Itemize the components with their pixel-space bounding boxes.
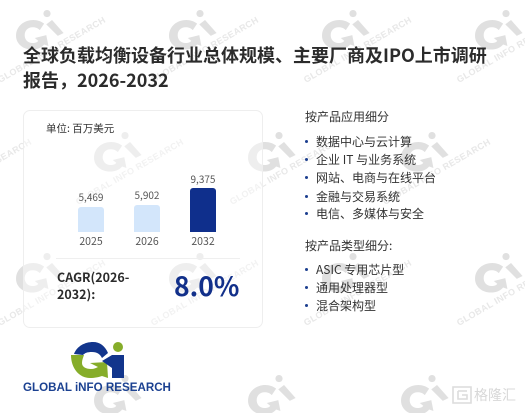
icon: G green body [71, 355, 108, 378]
title: 报告，2026-2032 [23, 67, 169, 93]
CAGR label: CAGR(2026- [57, 267, 129, 286]
watermark pattern: GLOBAL INFO RESEARCH [149, 15, 260, 85]
type segment list [305, 261, 404, 314]
watermark pattern: GLOBAL INFO RESEARCH [302, 15, 413, 85]
application segment list: 电信、多媒体与安全 [316, 205, 424, 222]
type segment heading: 按产品类型细分: [305, 237, 392, 254]
watermark pattern: GLOBAL INFO RESEARCH [74, 137, 185, 207]
icon: i stem [102, 355, 124, 378]
application segment list: 金融与交易系统 [316, 188, 400, 205]
application segment list: 网站、电商与在线平台 [316, 169, 436, 186]
CAGR label: 2032): [57, 284, 95, 303]
divider [56, 258, 240, 259]
application segment list: 企业 IT 与业务系统 [316, 151, 416, 168]
type segment list: 混合架构型 [316, 297, 376, 314]
bar 2026 [134, 205, 160, 232]
watermark pattern: GLOBAL INFO RESEARCH [302, 258, 413, 328]
panel: market size card [23, 110, 263, 328]
unit label: 单位: 百万美元 [46, 121, 114, 136]
CAGR value: 8.0% [174, 265, 239, 304]
icon: G blue arc [74, 342, 108, 358]
source watermark: 格隆汇 [452, 385, 516, 405]
year 2026: 2026 [135, 234, 159, 249]
value 2025: 5,469 [78, 189, 103, 204]
CAGR label [57, 267, 129, 303]
application segment heading: 按产品应用细分 [305, 108, 389, 125]
watermark pattern: GLOBAL INFO RESEARCH [228, 137, 339, 207]
type segment list: ASIC 专用芯片型 [316, 261, 404, 278]
icon: i dot [113, 342, 123, 352]
type segment list: 通用处理器型 [316, 279, 388, 296]
year 2032: 2032 [191, 234, 215, 249]
title: 全球负载均衡设备行业总体规模、主要厂商及IPO上市调研 [23, 42, 487, 68]
source watermark: 格隆汇: 格隆汇 [474, 385, 516, 405]
watermark pattern: GLOBAL INFO RESEARCH [381, 137, 492, 207]
value 2026: 5,902 [134, 187, 159, 202]
bar 2032 [190, 188, 216, 232]
application segment list [305, 133, 436, 222]
bar 2025 [78, 207, 104, 232]
bar chart [78, 171, 216, 249]
logo wordmark: GLOBAL iNFO RESEARCH [23, 381, 171, 394]
watermark pattern: GLOBAL INFO RESEARCH [149, 258, 260, 328]
logo: Global Info Research [23, 342, 171, 394]
application segment list: 数据中心与云计算 [316, 133, 412, 150]
year 2025: 2025 [79, 234, 103, 249]
value 2032: 9,375 [190, 171, 215, 186]
title [23, 42, 487, 93]
